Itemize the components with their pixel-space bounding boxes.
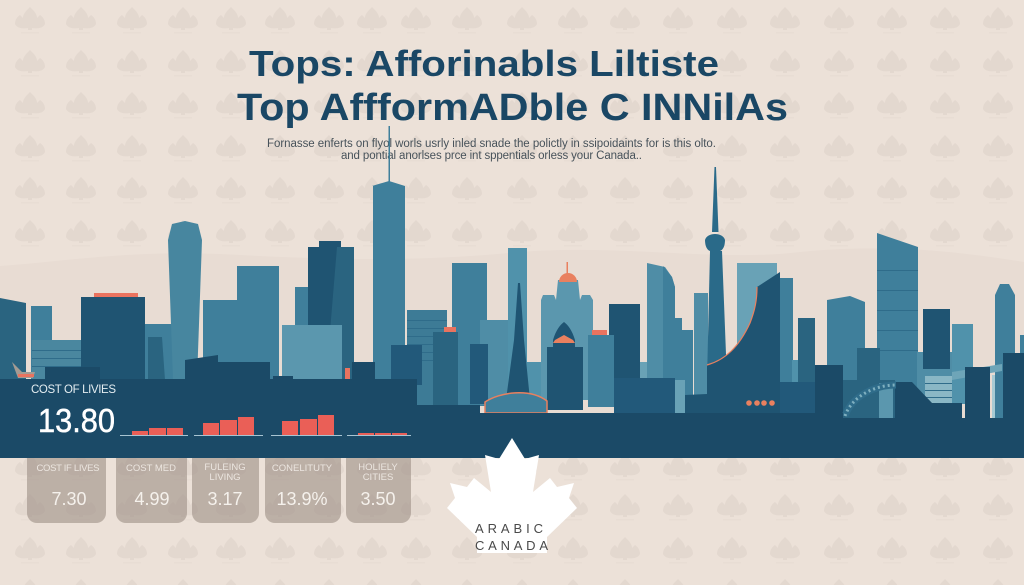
communications tower xyxy=(705,167,727,380)
headline value: 13.80 xyxy=(38,402,115,439)
stepped low buildings xyxy=(685,394,707,413)
stat card 4: 13.9% xyxy=(276,489,328,509)
stat card 4 xyxy=(265,458,341,523)
background hill xyxy=(0,248,1024,420)
stat card 2 xyxy=(116,458,187,523)
stat card 3: 3.17 xyxy=(207,489,243,509)
coral dots xyxy=(746,400,775,406)
light office building xyxy=(282,325,342,380)
domed pavilion xyxy=(485,393,547,413)
logo text xyxy=(475,521,548,553)
stat card 5: HOLIELY xyxy=(358,462,398,473)
bar chart 3 xyxy=(271,415,342,436)
curved dark tower xyxy=(707,272,780,413)
stripes on towers xyxy=(32,270,952,398)
stat card 5 xyxy=(346,458,411,523)
front dark silhouettes xyxy=(45,353,1024,418)
stat card 5: 3.50 xyxy=(360,489,396,509)
stat card 1: 7.30 xyxy=(51,489,87,509)
stat card 3 xyxy=(192,458,259,523)
logo text: ARABIC xyxy=(475,521,543,536)
bar chart 1 xyxy=(120,428,188,436)
boat xyxy=(12,362,35,378)
subtitle: and pontial anorlses prce int sppentials orless your Canada.. xyxy=(341,150,642,162)
cost of living label: COST OF LIVIES xyxy=(31,384,116,396)
stat card 2: 4.99 xyxy=(134,489,170,509)
subtitle xyxy=(267,138,716,162)
mid front buildings xyxy=(547,322,685,413)
stat card 3: LIVING xyxy=(209,472,241,483)
stat card 5: CITIES xyxy=(363,472,393,483)
title: Top AffformADble C INNilAs xyxy=(237,87,788,129)
stat card 2: COST MED xyxy=(126,463,176,474)
bridge xyxy=(845,385,896,416)
logo text: CANADA xyxy=(475,538,548,553)
maple leaf logo xyxy=(447,438,577,553)
dark band xyxy=(0,379,1024,458)
rooftop lattice right xyxy=(952,364,1002,380)
city skyline xyxy=(0,126,1024,418)
bar chart 4 xyxy=(347,433,411,436)
coral roof accents xyxy=(94,293,607,380)
stat card 4: CONELITUTY xyxy=(272,463,333,474)
bar chart 2 xyxy=(194,417,263,436)
back layer buildings xyxy=(0,126,1024,418)
stat card 1: COST IF LIVES xyxy=(36,463,100,474)
title: Tops: Afforinabls Liltiste xyxy=(249,43,719,84)
title xyxy=(237,43,788,129)
stat card 1 xyxy=(27,458,106,523)
dark mid layer buildings xyxy=(81,283,950,418)
stat card 3: FULEING xyxy=(204,462,246,473)
subtitle: Fornasse enferts on flyol worls usrly inled snade the polictly in ssipoidaints for is this olto. xyxy=(267,138,716,150)
